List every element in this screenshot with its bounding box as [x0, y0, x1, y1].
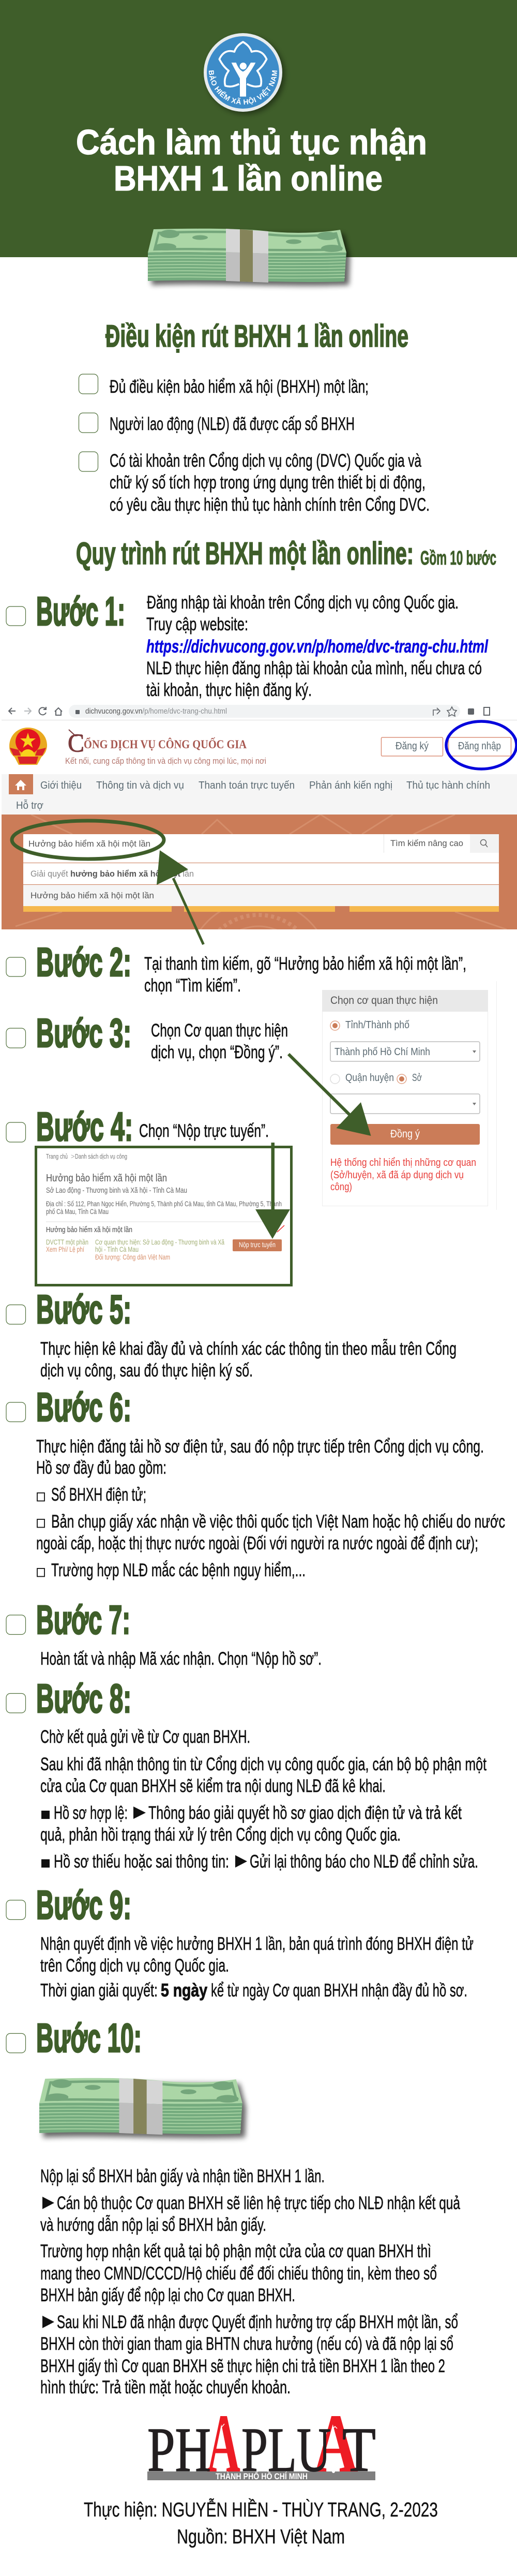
step 6 heading — [6, 1384, 131, 1430]
logo: Phap Luat newspaper: A — [207, 2397, 240, 2490]
radio: district or department — [330, 1072, 422, 1084]
credits — [84, 2498, 438, 2548]
navigation bar: Thủ tục hành chính — [406, 780, 490, 791]
panel: service detail screenshot: Hưởng bảo hiểm xã hội một lần — [46, 1225, 132, 1234]
portal name: C — [68, 728, 84, 757]
navigation bar: Giới thiệu — [40, 780, 82, 791]
panel: service detail screenshot: hội - Tỉnh Cà Mau — [95, 1245, 139, 1253]
step 6 heading: Bước 6: — [36, 1384, 131, 1430]
step 2 heading — [6, 939, 131, 985]
register button — [382, 737, 443, 756]
step 8 heading — [6, 1676, 131, 1721]
portal name — [65, 728, 266, 766]
panel: service detail screenshot: Cơ quan thực hiện: Sở Lao động - Thương binh và Xã — [95, 1238, 224, 1246]
panel: agency selection form: Chọn cơ quan thực hiện — [330, 995, 438, 1006]
screenshot: national public service portal — [2, 705, 517, 929]
search banner: Tìm kiếm nâng cao — [390, 838, 463, 848]
navigation bar: Hỗ trợ — [16, 800, 43, 811]
step 7 heading: Bước 7: — [36, 1597, 130, 1642]
step 8 text — [40, 1727, 486, 1872]
logo: Phap Luat newspaper: PH — [147, 2415, 211, 2485]
step 10 heading — [6, 2015, 142, 2061]
panel: service detail screenshot: phố Cà Mau, Tỉnh Cà Mau — [46, 1207, 109, 1216]
panel: agency selection form — [322, 981, 497, 1210]
step 5 text: dịch vụ công, sau đó thực hiện ký số. — [40, 1360, 253, 1381]
step 3 text: dịch vụ, chọn “Đồng ý”. — [151, 1042, 283, 1062]
panel: service detail screenshot: > — [71, 1152, 75, 1160]
step 2 text: chọn “Tìm kiếm”. — [144, 975, 241, 996]
step 7 text: Hoàn tất và nhập Mã xác nhận. Chọn “Nộp hồ sơ”. — [40, 1649, 322, 1669]
button: submit online: Nộp trực tuyến — [239, 1240, 276, 1249]
logo: Phap Luat newspaper: PLU — [241, 2415, 331, 2485]
step 10 text: Nộp lại sổ BHXH bản giấy và nhận tiền BHXH 1 lần. — [40, 2166, 325, 2186]
arrow: to agree button — [288, 1054, 371, 1136]
step 1 text: tài khoản, thực hiện đăng ký. — [146, 680, 312, 700]
arrow: to search box — [157, 850, 204, 944]
step 1 heading — [6, 588, 125, 634]
radio: district or department: Sở — [412, 1072, 422, 1084]
logo: Phap Luat newspaper: T — [342, 2415, 376, 2485]
step 5 text — [40, 1339, 457, 1381]
step 9 text: trên Cổng dịch vụ công Quốc gia. — [40, 1956, 229, 1976]
step 10 text: BHXH bản giấy để nộp lại cho Cơ quan BHXH. — [40, 2285, 295, 2305]
panel: service detail screenshot: Sở Lao động - Thương binh và Xã hội - Tỉnh Cà Mau — [46, 1186, 187, 1195]
search banner: Giải quyết hưởng bảo hiểm xã hội một lần — [31, 869, 194, 879]
search banner: Hưởng bảo hiểm xã hội một lần — [28, 839, 150, 849]
select: empty — [330, 1094, 480, 1114]
panel: service detail screenshot: Hưởng bảo hiểm xã hội một lần — [46, 1173, 167, 1184]
panel: service detail screenshot: Địa chỉ : Số 112, Phan Ngọc Hiển, Phường 5, Thành phố Cà Mau, tỉnh Cà Mau, Phường 5, Thành — [46, 1200, 282, 1208]
title: BHXH 1 lần online — [114, 159, 383, 198]
panel: service detail screenshot: Danh sách dịch vụ công — [75, 1152, 127, 1160]
green search highlight — [12, 821, 164, 859]
logo: Phap Luat newspaper: A — [313, 2397, 358, 2490]
panel: service detail screenshot: DVCTT một phần — [46, 1238, 88, 1246]
step 6 text — [36, 1437, 505, 1580]
step 1 heading: Bước 1: — [36, 588, 125, 634]
navigation bar: Phản ánh kiến nghị — [309, 780, 392, 791]
button: agree: Đồng ý — [390, 1128, 420, 1140]
select: city: Thành phố Hồ Chí Minh — [334, 1046, 430, 1058]
title — [76, 123, 427, 198]
step 8 text: Hồ sơ thiếu hoặc sai thông tin: — [54, 1852, 229, 1872]
button: agree — [330, 1124, 480, 1145]
red note: Hệ thống chỉ hiển thị những cơ quan — [330, 1157, 476, 1168]
step 10 text: và hướng dẫn nộp lại sổ BHXH bản giấy. — [40, 2215, 266, 2235]
step 6 text: Hồ sơ đầy đủ bao gồm: — [36, 1458, 166, 1478]
step 10 heading: Bước 10: — [36, 2015, 142, 2061]
step 1 text — [146, 593, 489, 700]
step 3 text: Chọn Cơ quan thực hiện — [151, 1020, 288, 1041]
step 5 heading: Bước 5: — [36, 1286, 131, 1332]
search banner — [2, 815, 517, 929]
step 2 heading: Bước 2: — [36, 939, 131, 985]
red note — [330, 1157, 476, 1193]
register button: Đăng ký — [396, 741, 429, 752]
button: submit online — [233, 1239, 282, 1251]
step 2 text — [144, 954, 466, 996]
navigation bar: Thông tin và dịch vụ — [96, 780, 184, 791]
search banner: Hưởng bảo hiểm xã hội một lần — [31, 891, 154, 900]
condition 1 — [79, 374, 369, 397]
condition 1: Đủ điều kiện bảo hiểm xã hội (BHXH) một lần; — [110, 377, 369, 397]
step 4 text: Chọn “Nộp trực tuyến”. — [139, 1121, 269, 1141]
red note: công) — [330, 1181, 352, 1193]
navigation bar — [2, 774, 517, 815]
step 10 text: hình thức: Trả tiền mặt hoặc chuyển khoản. — [40, 2377, 291, 2397]
credits: Nguồn: BHXH Việt Nam — [177, 2526, 345, 2548]
logo: Phap Luat newspaper: THÀNH PHỐ HỒ CHÍ MINH — [216, 2471, 308, 2481]
step 3 text — [151, 1020, 288, 1062]
header band — [0, 0, 517, 257]
step 4 heading — [6, 1104, 133, 1149]
panel: conditions list — [79, 374, 430, 515]
emblem — [9, 728, 47, 765]
login button — [449, 737, 511, 756]
step 3 heading — [6, 1010, 131, 1056]
icon: stack of money — [148, 229, 350, 286]
step 9 text: 5 ngày — [161, 1980, 207, 2001]
step 8 text: Hồ sơ hợp lệ: — [54, 1803, 128, 1823]
portal name: Kết nối, cung cấp thông tin và dịch vụ công mọi lúc, mọi nơi — [65, 756, 266, 766]
browser bar — [9, 705, 490, 718]
step 10 text — [40, 2166, 460, 2397]
browser bar: dichvucong.gov.vn/p/home/dvc-trang-chu.html — [85, 707, 227, 716]
panel: service detail screenshot — [36, 1147, 292, 1285]
step 8 heading: Bước 8: — [36, 1676, 131, 1721]
step 5 heading — [6, 1286, 131, 1332]
icon: stack of money — [39, 2078, 246, 2138]
portal name: ỔNG DỊCH VỤ CÔNG QUỐC GIA — [84, 737, 247, 751]
step 9 text — [40, 1934, 474, 2001]
arrow: to submit button — [255, 1143, 290, 1239]
blue highlight circle — [446, 721, 516, 769]
radio: province: Tỉnh/Thành phố — [345, 1019, 409, 1031]
logo: Phap Luat newspaper — [147, 2397, 376, 2490]
condition 2 — [79, 413, 355, 434]
condition 2: Người lao động (NLĐ) đã được cấp sổ BHXH — [110, 414, 355, 434]
login button: Đăng nhập — [458, 741, 501, 752]
title: Cách làm thủ tục nhận — [76, 123, 427, 162]
panel: service detail screenshot: Trang chủ — [46, 1152, 68, 1160]
icon: BHXH Viet Nam logo: BẢO HIỂM XÃ HỘI VIỆT NAM — [209, 70, 277, 105]
step 3 heading: Bước 3: — [36, 1010, 131, 1056]
step 9 heading — [6, 1882, 131, 1928]
panel: service detail screenshot: Xem Phí/ Lệ phí — [46, 1245, 84, 1253]
step 4 heading: Bước 4: — [36, 1104, 133, 1149]
step 6 text: Trường hợp NLĐ mắc các bệnh nguy hiểm,... — [51, 1560, 306, 1580]
step 8 text: Chờ kết quả gửi về từ Cơ quan BHXH. — [40, 1727, 250, 1747]
radio: district or department: Quận huyện — [345, 1072, 394, 1084]
red note: (Sở/huyện, xã đã áp dụng dịch vụ — [330, 1169, 464, 1181]
step 6 text: Sổ BHXH điện tử; — [51, 1485, 146, 1505]
select: city — [330, 1042, 480, 1061]
step 9 text: Thời gian giải quyết: — [40, 1980, 158, 2001]
step 9 heading: Bước 9: — [36, 1882, 131, 1928]
icon: BHXH Viet Nam logo — [204, 33, 286, 116]
condition 3 — [79, 451, 430, 515]
navigation bar: Thanh toán trực tuyến — [199, 780, 295, 791]
step 1 text: Truy cập website: — [146, 614, 248, 634]
step 7 heading — [6, 1597, 130, 1642]
panel: service detail screenshot: Đối tượng: Công dân Việt Nam — [95, 1253, 170, 1261]
